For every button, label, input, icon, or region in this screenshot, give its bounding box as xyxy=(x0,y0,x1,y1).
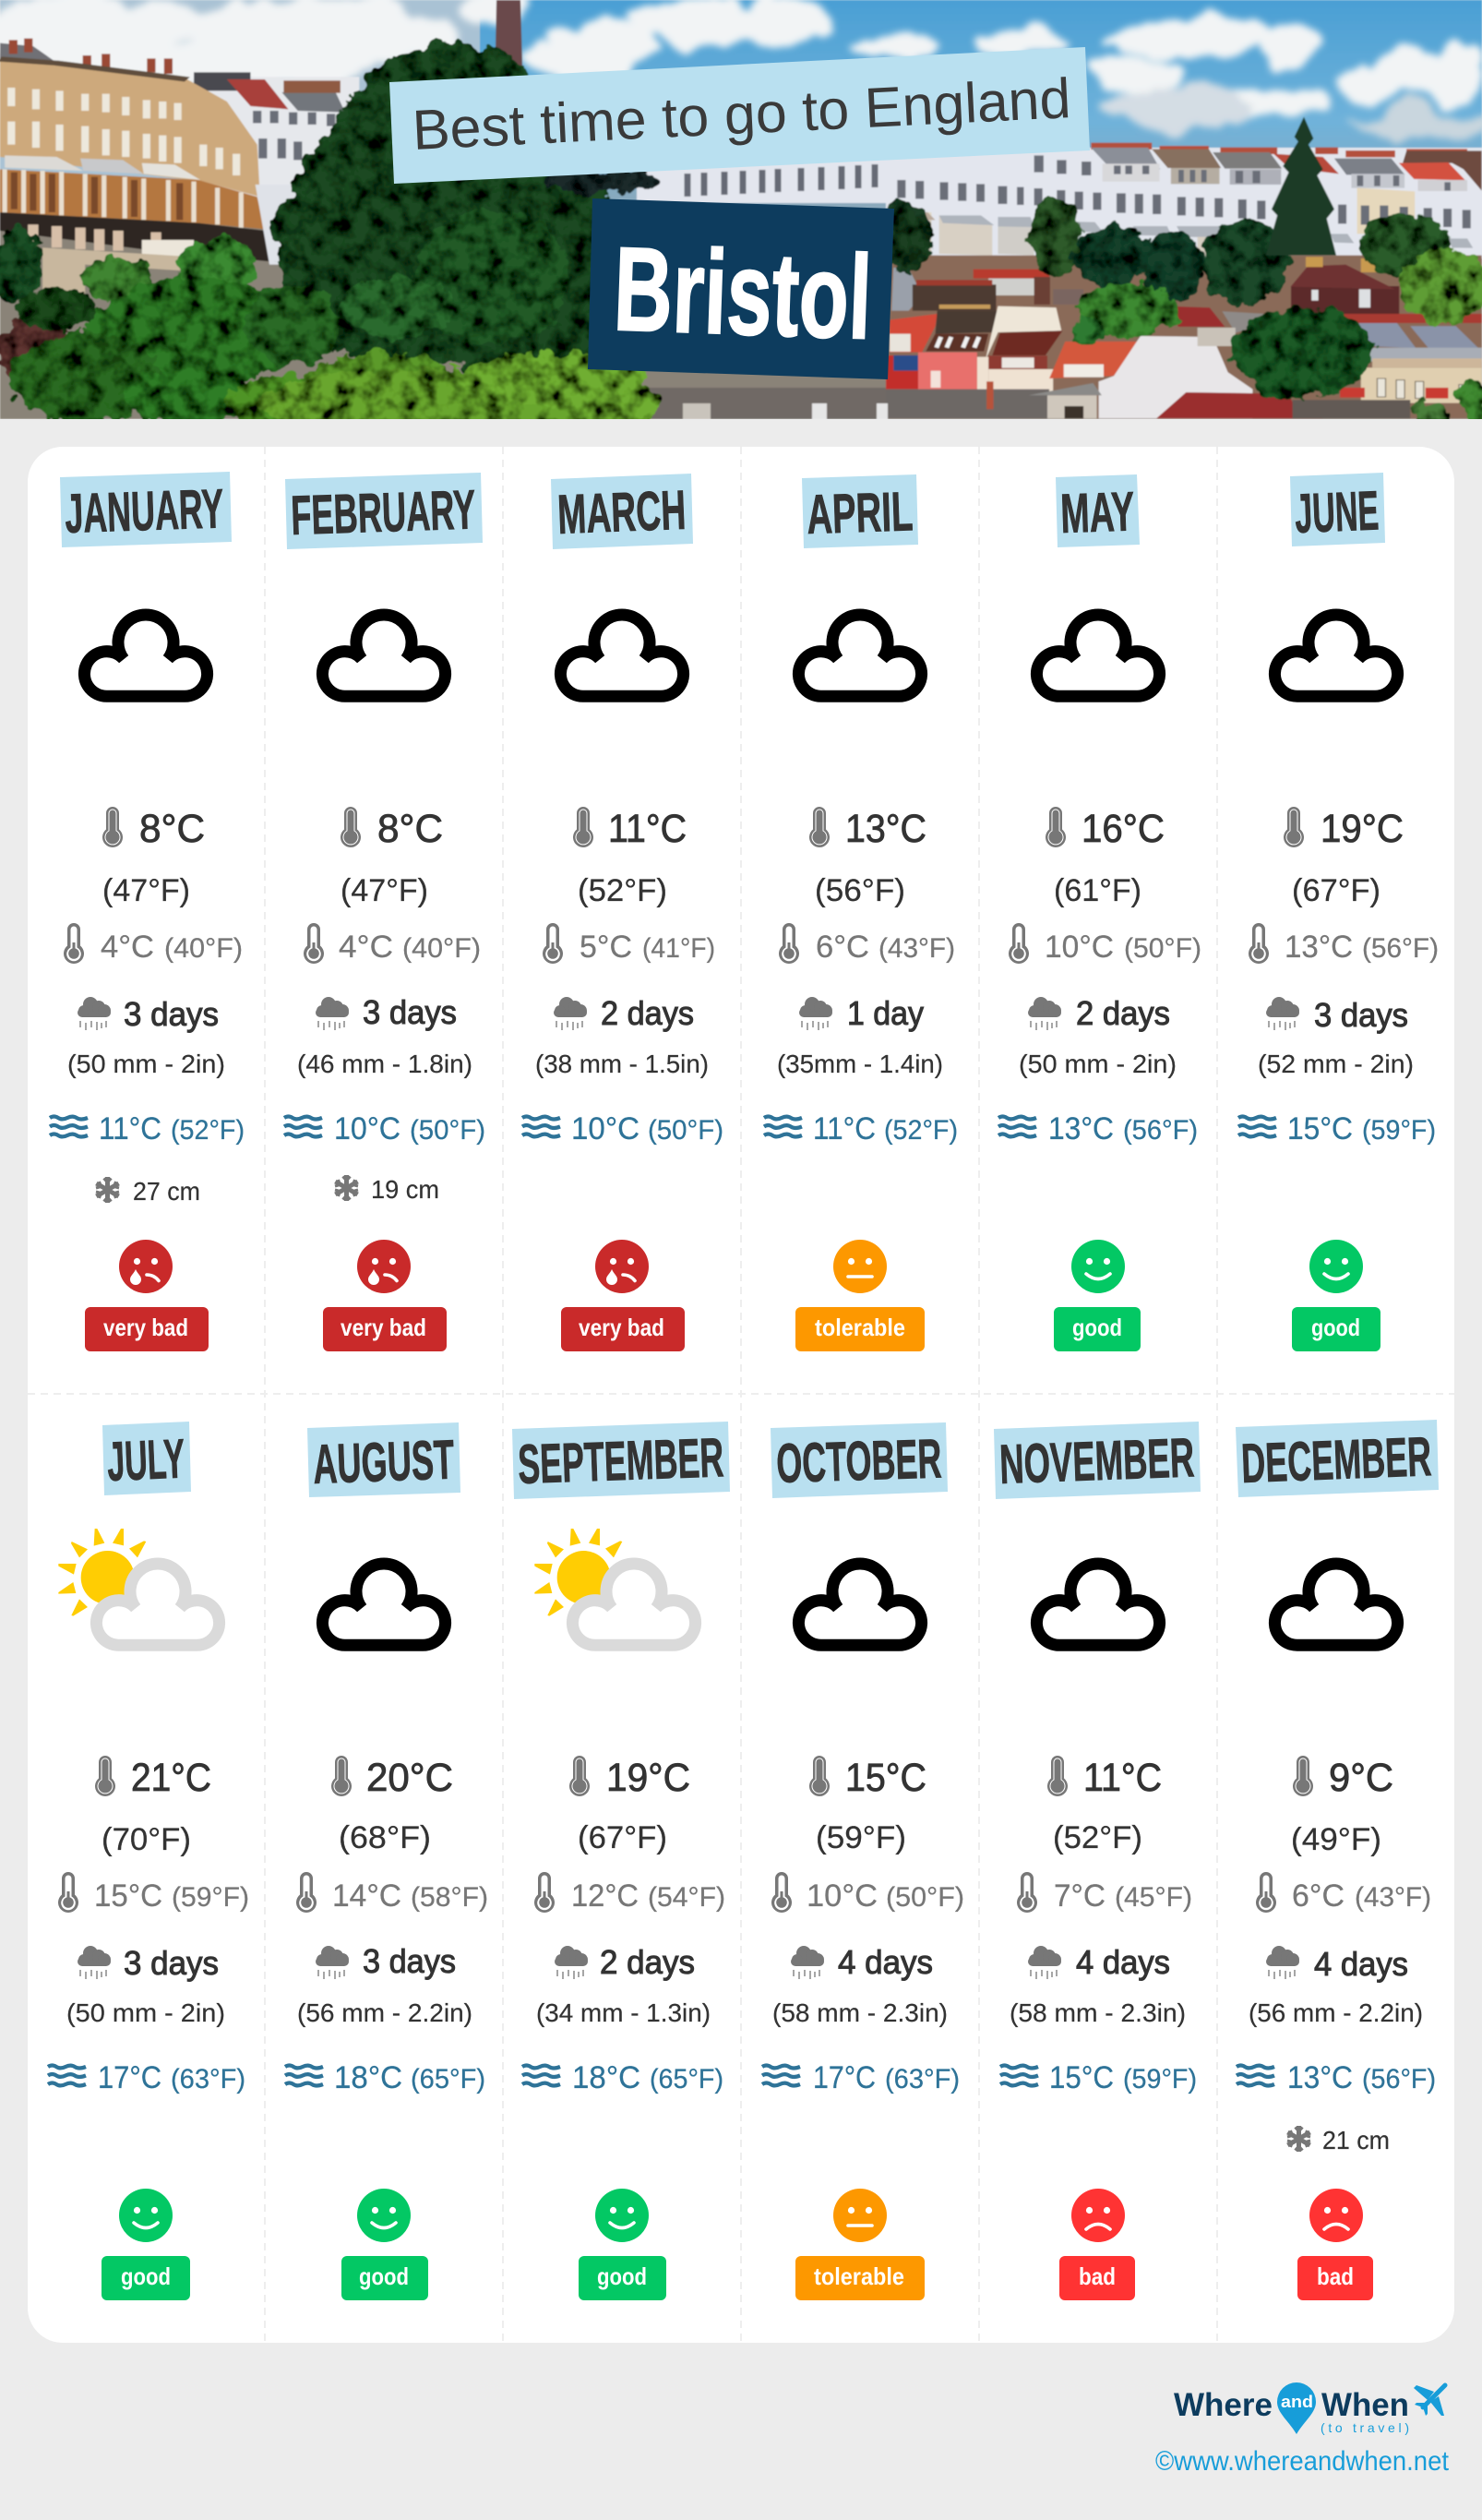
month label xyxy=(1290,473,1385,546)
icon: cloudy xyxy=(322,1564,446,1645)
icon: cloudy xyxy=(1036,1564,1160,1645)
rating: tolerable: tolerable xyxy=(815,1314,905,1341)
panel: March xyxy=(522,474,723,1351)
sea temperature xyxy=(764,1111,958,1146)
high temperature: 8°C xyxy=(377,807,443,851)
low temperature xyxy=(58,1872,249,1914)
sea temperature: (59°F) xyxy=(1123,2064,1197,2094)
rating: bad xyxy=(1059,2189,1135,2300)
website credit: ©www.whereandwhen.net xyxy=(1155,2446,1450,2477)
panel: May xyxy=(998,474,1201,1351)
high temperature xyxy=(341,807,443,908)
high temperature: 13°C xyxy=(845,807,926,851)
low temperature: 6°C xyxy=(816,930,869,965)
rainfall: 4 days xyxy=(838,1943,933,1981)
rainfall xyxy=(67,995,225,1078)
logo: Where and When (to travel): (to travel) xyxy=(1321,2420,1409,2435)
sea temperature: 11°C xyxy=(813,1111,876,1146)
high temperature xyxy=(95,1756,211,1857)
sea temperature: (65°F) xyxy=(411,2064,485,2094)
rainfall: (50 mm - 2in) xyxy=(67,1050,225,1078)
sea temperature: 18°C xyxy=(572,2060,640,2095)
snowfall: 19 cm xyxy=(371,1175,439,1204)
snowfall xyxy=(335,1175,439,1204)
low temperature: (56°F) xyxy=(1362,933,1439,964)
sea temperature xyxy=(522,2060,723,2095)
snowfall: 27 cm xyxy=(133,1177,200,1206)
snowfall xyxy=(1287,2126,1390,2154)
month label: FEBRUARY xyxy=(290,478,476,546)
logo: Where and When (to travel): When xyxy=(1321,2387,1409,2423)
hero photo: Bristol skyline xyxy=(0,0,1482,437)
high temperature: 11°C xyxy=(1083,1756,1162,1800)
high temperature xyxy=(331,1756,453,1855)
high temperature: (47°F) xyxy=(102,873,190,908)
high temperature: (67°F) xyxy=(1292,873,1380,908)
high temperature: (49°F) xyxy=(1291,1822,1381,1857)
month label: NOVEMBER xyxy=(998,1426,1195,1495)
high temperature xyxy=(1047,1756,1162,1855)
rating: good xyxy=(102,2189,190,2300)
low temperature: (50°F) xyxy=(886,1882,964,1913)
low temperature xyxy=(1249,923,1439,965)
low temperature xyxy=(1256,1872,1431,1914)
sea temperature: 10°C xyxy=(334,1111,400,1146)
sea temperature: (52°F) xyxy=(884,1115,958,1146)
sea temperature: 15°C xyxy=(1049,2060,1114,2095)
high temperature xyxy=(809,1756,926,1855)
low temperature: (40°F) xyxy=(164,933,243,964)
low temperature xyxy=(1009,923,1201,965)
rainfall xyxy=(535,994,709,1078)
logo: Where and When (to travel) xyxy=(1174,2382,1445,2435)
sea temperature: (63°F) xyxy=(885,2064,960,2094)
rainfall xyxy=(536,1943,711,2027)
rating: good xyxy=(579,2189,666,2300)
sea temperature xyxy=(762,2060,960,2095)
low temperature: (43°F) xyxy=(878,933,955,964)
rainfall xyxy=(777,994,943,1078)
sea temperature xyxy=(1237,2060,1436,2095)
sea temperature: (50°F) xyxy=(648,1115,723,1146)
low temperature: (40°F) xyxy=(402,933,481,964)
rainfall: (58 mm - 2.3in) xyxy=(1010,1998,1186,2027)
high temperature: 8°C xyxy=(139,807,205,851)
sea temperature: (63°F) xyxy=(171,2064,245,2094)
high temperature: 21°C xyxy=(131,1756,211,1800)
rainfall: 3 days xyxy=(1314,996,1408,1034)
rainfall: (46 mm - 1.8in) xyxy=(297,1050,472,1078)
icon: cloudy xyxy=(1036,615,1160,696)
rating: good xyxy=(341,2189,428,2300)
high temperature: (67°F) xyxy=(578,1820,667,1855)
low temperature xyxy=(1017,1872,1192,1914)
rating: good: good xyxy=(1311,1314,1360,1341)
sea temperature: 18°C xyxy=(334,2060,402,2095)
month label: JANUARY xyxy=(64,477,224,545)
high temperature: 19°C xyxy=(1321,807,1404,851)
high temperature: (56°F) xyxy=(815,873,905,908)
month label xyxy=(285,473,483,549)
icon: map pin with "and": and xyxy=(1281,2393,1313,2411)
icon: cloudy xyxy=(798,615,922,696)
sea temperature xyxy=(998,1111,1198,1146)
panel: October xyxy=(762,1422,964,2300)
low temperature: (43°F) xyxy=(1355,1882,1431,1913)
panel: April xyxy=(764,474,958,1351)
low temperature: 13°C xyxy=(1285,930,1353,965)
sea temperature: (50°F) xyxy=(410,1115,485,1146)
high temperature: 15°C xyxy=(845,1756,926,1800)
low temperature: (41°F) xyxy=(642,933,715,964)
rainfall xyxy=(1010,1943,1186,2027)
high temperature: (68°F) xyxy=(339,1820,431,1855)
rainfall: 4 days xyxy=(1076,1943,1170,1981)
low temperature: (54°F) xyxy=(648,1882,725,1913)
rainfall: (58 mm - 2.3in) xyxy=(772,1998,948,2027)
rating: very bad xyxy=(323,1240,447,1351)
panel: August xyxy=(285,1422,488,2300)
icon: partly sunny xyxy=(534,1529,696,1645)
sea temperature: 11°C xyxy=(99,1111,161,1146)
rating: bad: bad xyxy=(1079,2262,1116,2290)
icon: partly sunny xyxy=(58,1529,220,1645)
sea temperature: (65°F) xyxy=(650,2064,723,2094)
sea temperature: 13°C xyxy=(1287,2060,1353,2095)
low temperature xyxy=(64,923,243,965)
sea temperature: (52°F) xyxy=(171,1115,245,1146)
sea temperature: (59°F) xyxy=(1362,1115,1436,1146)
title banner: Best time to go to England: Best time to go to England xyxy=(411,66,1072,162)
rainfall xyxy=(1258,996,1414,1078)
panel: September xyxy=(512,1422,730,2300)
rainfall: (52 mm - 2in) xyxy=(1258,1050,1414,1078)
icon: cloudy xyxy=(798,1564,922,1645)
icon: cloudy xyxy=(84,615,208,696)
rainfall: 1 day xyxy=(847,994,924,1032)
month label xyxy=(802,474,918,548)
high temperature: (52°F) xyxy=(1053,1820,1142,1855)
rating: bad: bad xyxy=(1317,2262,1354,2290)
low temperature: (45°F) xyxy=(1115,1882,1192,1913)
high temperature: (61°F) xyxy=(1054,873,1141,908)
sea temperature xyxy=(50,1111,245,1146)
high temperature xyxy=(102,807,205,908)
rating: very bad: very bad xyxy=(579,1314,664,1341)
rainfall xyxy=(772,1943,948,2027)
month label xyxy=(102,1422,191,1495)
rating: good xyxy=(1054,1240,1141,1351)
high temperature: (59°F) xyxy=(816,1820,906,1855)
month label xyxy=(60,472,232,547)
rating: tolerable: tolerable xyxy=(814,2262,904,2290)
panel: November xyxy=(994,1422,1201,2300)
sea temperature: 15°C xyxy=(1287,1111,1353,1146)
low temperature xyxy=(304,923,481,965)
low temperature: 10°C xyxy=(807,1878,878,1914)
high temperature: 19°C xyxy=(606,1756,690,1800)
month label xyxy=(512,1422,730,1499)
low temperature: 10°C xyxy=(1045,930,1114,965)
sea temperature: (56°F) xyxy=(1362,2064,1436,2094)
panel: monthly weather card xyxy=(28,447,1454,2343)
title banner: Best time to go to England xyxy=(389,47,1090,184)
low temperature: 12°C xyxy=(571,1878,639,1914)
high temperature xyxy=(1291,1756,1393,1857)
low temperature xyxy=(771,1872,964,1914)
rating: good xyxy=(1292,1240,1380,1351)
panel: July xyxy=(48,1422,249,2300)
rating: very bad xyxy=(85,1240,209,1351)
rating: tolerable xyxy=(795,2189,925,2300)
sea temperature xyxy=(522,1111,723,1146)
low temperature: (58°F) xyxy=(411,1882,488,1913)
rating: very bad: very bad xyxy=(341,1314,426,1341)
rainfall: 3 days xyxy=(363,993,457,1031)
rainfall: 2 days xyxy=(1076,994,1170,1032)
low temperature: (59°F) xyxy=(172,1882,249,1913)
rainfall xyxy=(66,1944,225,2027)
month label xyxy=(307,1422,460,1497)
month label xyxy=(771,1422,948,1498)
low temperature: 14°C xyxy=(332,1878,401,1914)
icon: cloudy xyxy=(560,615,684,696)
month label: MAY xyxy=(1059,480,1135,545)
month label xyxy=(1056,474,1140,547)
rainfall: 3 days xyxy=(124,1944,219,1982)
panel: December xyxy=(1236,1420,1439,2300)
rainfall: (34 mm - 1.3in) xyxy=(536,1998,711,2027)
rainfall: 2 days xyxy=(601,994,694,1032)
icon: plane xyxy=(1414,2385,1445,2416)
high temperature xyxy=(809,807,926,908)
month label: MARCH xyxy=(556,479,687,546)
low temperature: 5°C xyxy=(580,930,632,965)
high temperature: 16°C xyxy=(1082,807,1165,851)
rainfall: 4 days xyxy=(1314,1945,1408,1983)
high temperature xyxy=(1046,807,1165,908)
sea temperature xyxy=(284,1111,485,1146)
rainfall: (50 mm - 2in) xyxy=(1019,1050,1177,1078)
icon: cloudy xyxy=(1274,1564,1398,1645)
rating: very bad: very bad xyxy=(103,1314,188,1341)
month label: AUGUST xyxy=(312,1428,455,1495)
month label: OCTOBER xyxy=(775,1427,942,1494)
snowfall xyxy=(96,1177,200,1206)
sea temperature xyxy=(285,2060,485,2095)
rating: bad xyxy=(1297,2189,1373,2300)
low temperature: (50°F) xyxy=(1124,933,1201,964)
rainfall: 2 days xyxy=(600,1943,695,1981)
city banner: Bristol xyxy=(588,198,894,379)
rating: tolerable xyxy=(795,1240,925,1351)
rainfall xyxy=(1019,994,1177,1078)
rating: good: good xyxy=(359,2262,409,2290)
sea temperature: 10°C xyxy=(571,1111,639,1146)
low temperature xyxy=(534,1872,725,1914)
month label: JUNE xyxy=(1294,479,1380,545)
rainfall: (35mm - 1.4in) xyxy=(777,1050,943,1078)
rainfall: 3 days xyxy=(124,995,219,1033)
rating: good: good xyxy=(597,2262,647,2290)
snowfall: 21 cm xyxy=(1322,2126,1390,2154)
month label xyxy=(994,1422,1201,1499)
sea temperature: 17°C xyxy=(98,2060,161,2095)
rainfall: (56 mm - 2.2in) xyxy=(297,1998,472,2027)
rating: very bad xyxy=(561,1240,685,1351)
panel: February xyxy=(284,473,485,1351)
rainfall: (38 mm - 1.5in) xyxy=(535,1050,709,1078)
rating: good: good xyxy=(121,2262,171,2290)
high temperature: 11°C xyxy=(608,807,687,851)
panel: June xyxy=(1238,473,1439,1351)
month label: APRIL xyxy=(806,480,914,546)
icon: cloudy xyxy=(322,615,446,696)
low temperature: 7°C xyxy=(1054,1878,1106,1914)
icon: cloudy xyxy=(1274,615,1398,696)
rainfall xyxy=(1249,1945,1423,2027)
high temperature: (70°F) xyxy=(102,1822,191,1857)
low temperature xyxy=(296,1872,488,1914)
month label: SEPTEMBER xyxy=(517,1426,724,1495)
sea temperature xyxy=(1000,2060,1197,2095)
rainfall: (56 mm - 2.2in) xyxy=(1249,1998,1423,2027)
low temperature: 15°C xyxy=(94,1878,162,1914)
month label xyxy=(551,474,693,549)
rating: good: good xyxy=(1072,1314,1122,1341)
high temperature: (47°F) xyxy=(341,873,428,908)
sea temperature: 13°C xyxy=(1048,1111,1114,1146)
city banner: Bristol: Bristol xyxy=(612,222,874,365)
sea temperature: (56°F) xyxy=(1123,1115,1198,1146)
month label: JULY xyxy=(106,1428,185,1493)
high temperature: (52°F) xyxy=(578,873,667,908)
high temperature xyxy=(1284,807,1404,908)
low temperature: 4°C xyxy=(101,930,154,965)
panel: January xyxy=(50,472,245,1351)
icon: map pin with "and" xyxy=(1277,2382,1316,2434)
sea temperature xyxy=(1238,1111,1436,1146)
low temperature xyxy=(543,923,715,965)
low temperature: 6°C xyxy=(1292,1878,1345,1914)
low temperature: 4°C xyxy=(339,930,393,965)
high temperature: 20°C xyxy=(366,1756,453,1800)
rainfall: 3 days xyxy=(363,1942,456,1980)
high temperature xyxy=(573,807,687,908)
low temperature xyxy=(779,923,955,965)
high temperature xyxy=(569,1756,690,1855)
logo: Where and When (to travel): Where xyxy=(1174,2387,1273,2423)
high temperature: 9°C xyxy=(1329,1756,1393,1800)
rainfall xyxy=(297,1942,472,2027)
sea temperature xyxy=(48,2060,245,2095)
rainfall: (50 mm - 2in) xyxy=(66,1998,225,2027)
rainfall xyxy=(297,993,472,1078)
sea temperature: 17°C xyxy=(813,2060,876,2095)
